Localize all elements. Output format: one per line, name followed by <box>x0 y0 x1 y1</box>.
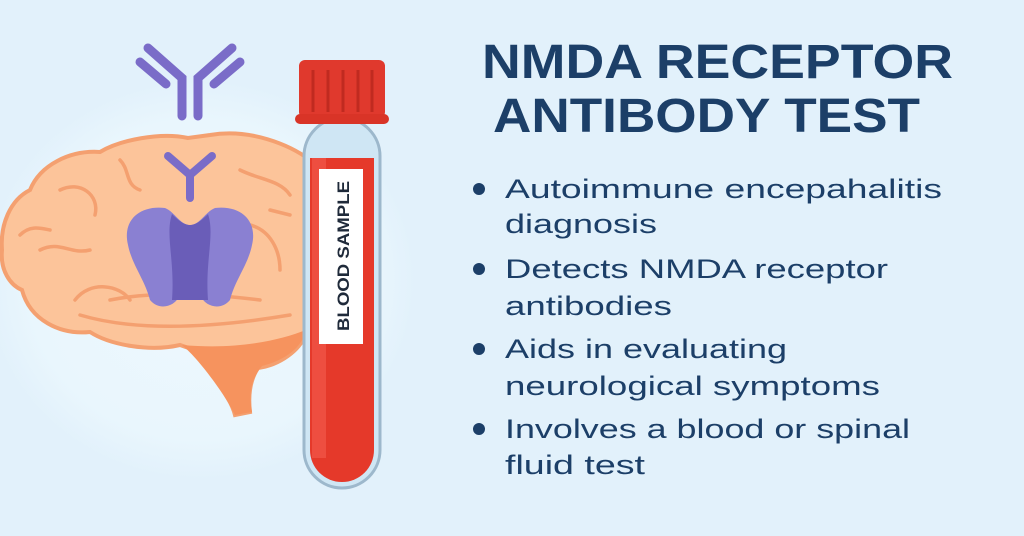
bullet 4 <box>473 414 910 480</box>
tube cap <box>299 60 385 118</box>
bullet 4: fluid test <box>505 450 646 480</box>
bullet 3: Aids in evaluating <box>505 334 787 364</box>
bullet 3 <box>473 334 880 401</box>
bullet 1: Autoimmune encepahalitis <box>505 174 942 204</box>
illustration: blood sample tube: BLOOD SAMPLE <box>334 181 353 331</box>
bullet 3: neurological symptoms <box>505 371 880 401</box>
tube label <box>319 169 363 344</box>
bullet 1: diagnosis <box>505 209 657 239</box>
bullet 2: antibodies <box>505 291 672 321</box>
bullet list <box>473 174 942 480</box>
bullet 1 <box>473 174 942 239</box>
icon: NMDA receptor <box>127 208 253 306</box>
bullet 2 <box>473 254 888 321</box>
bullet 4: Involves a blood or spinal <box>505 414 910 444</box>
bullet 2: Detects NMDA receptor <box>505 254 888 284</box>
illustration: brain <box>2 133 310 415</box>
title: NMDA RECEPTOR <box>482 36 953 89</box>
title: ANTIBODY TEST <box>493 90 920 143</box>
illustration: blood sample tube <box>295 60 389 488</box>
icon: antibody above brain <box>140 48 240 116</box>
icon: small antibody in brain <box>168 156 212 198</box>
title <box>482 36 953 143</box>
